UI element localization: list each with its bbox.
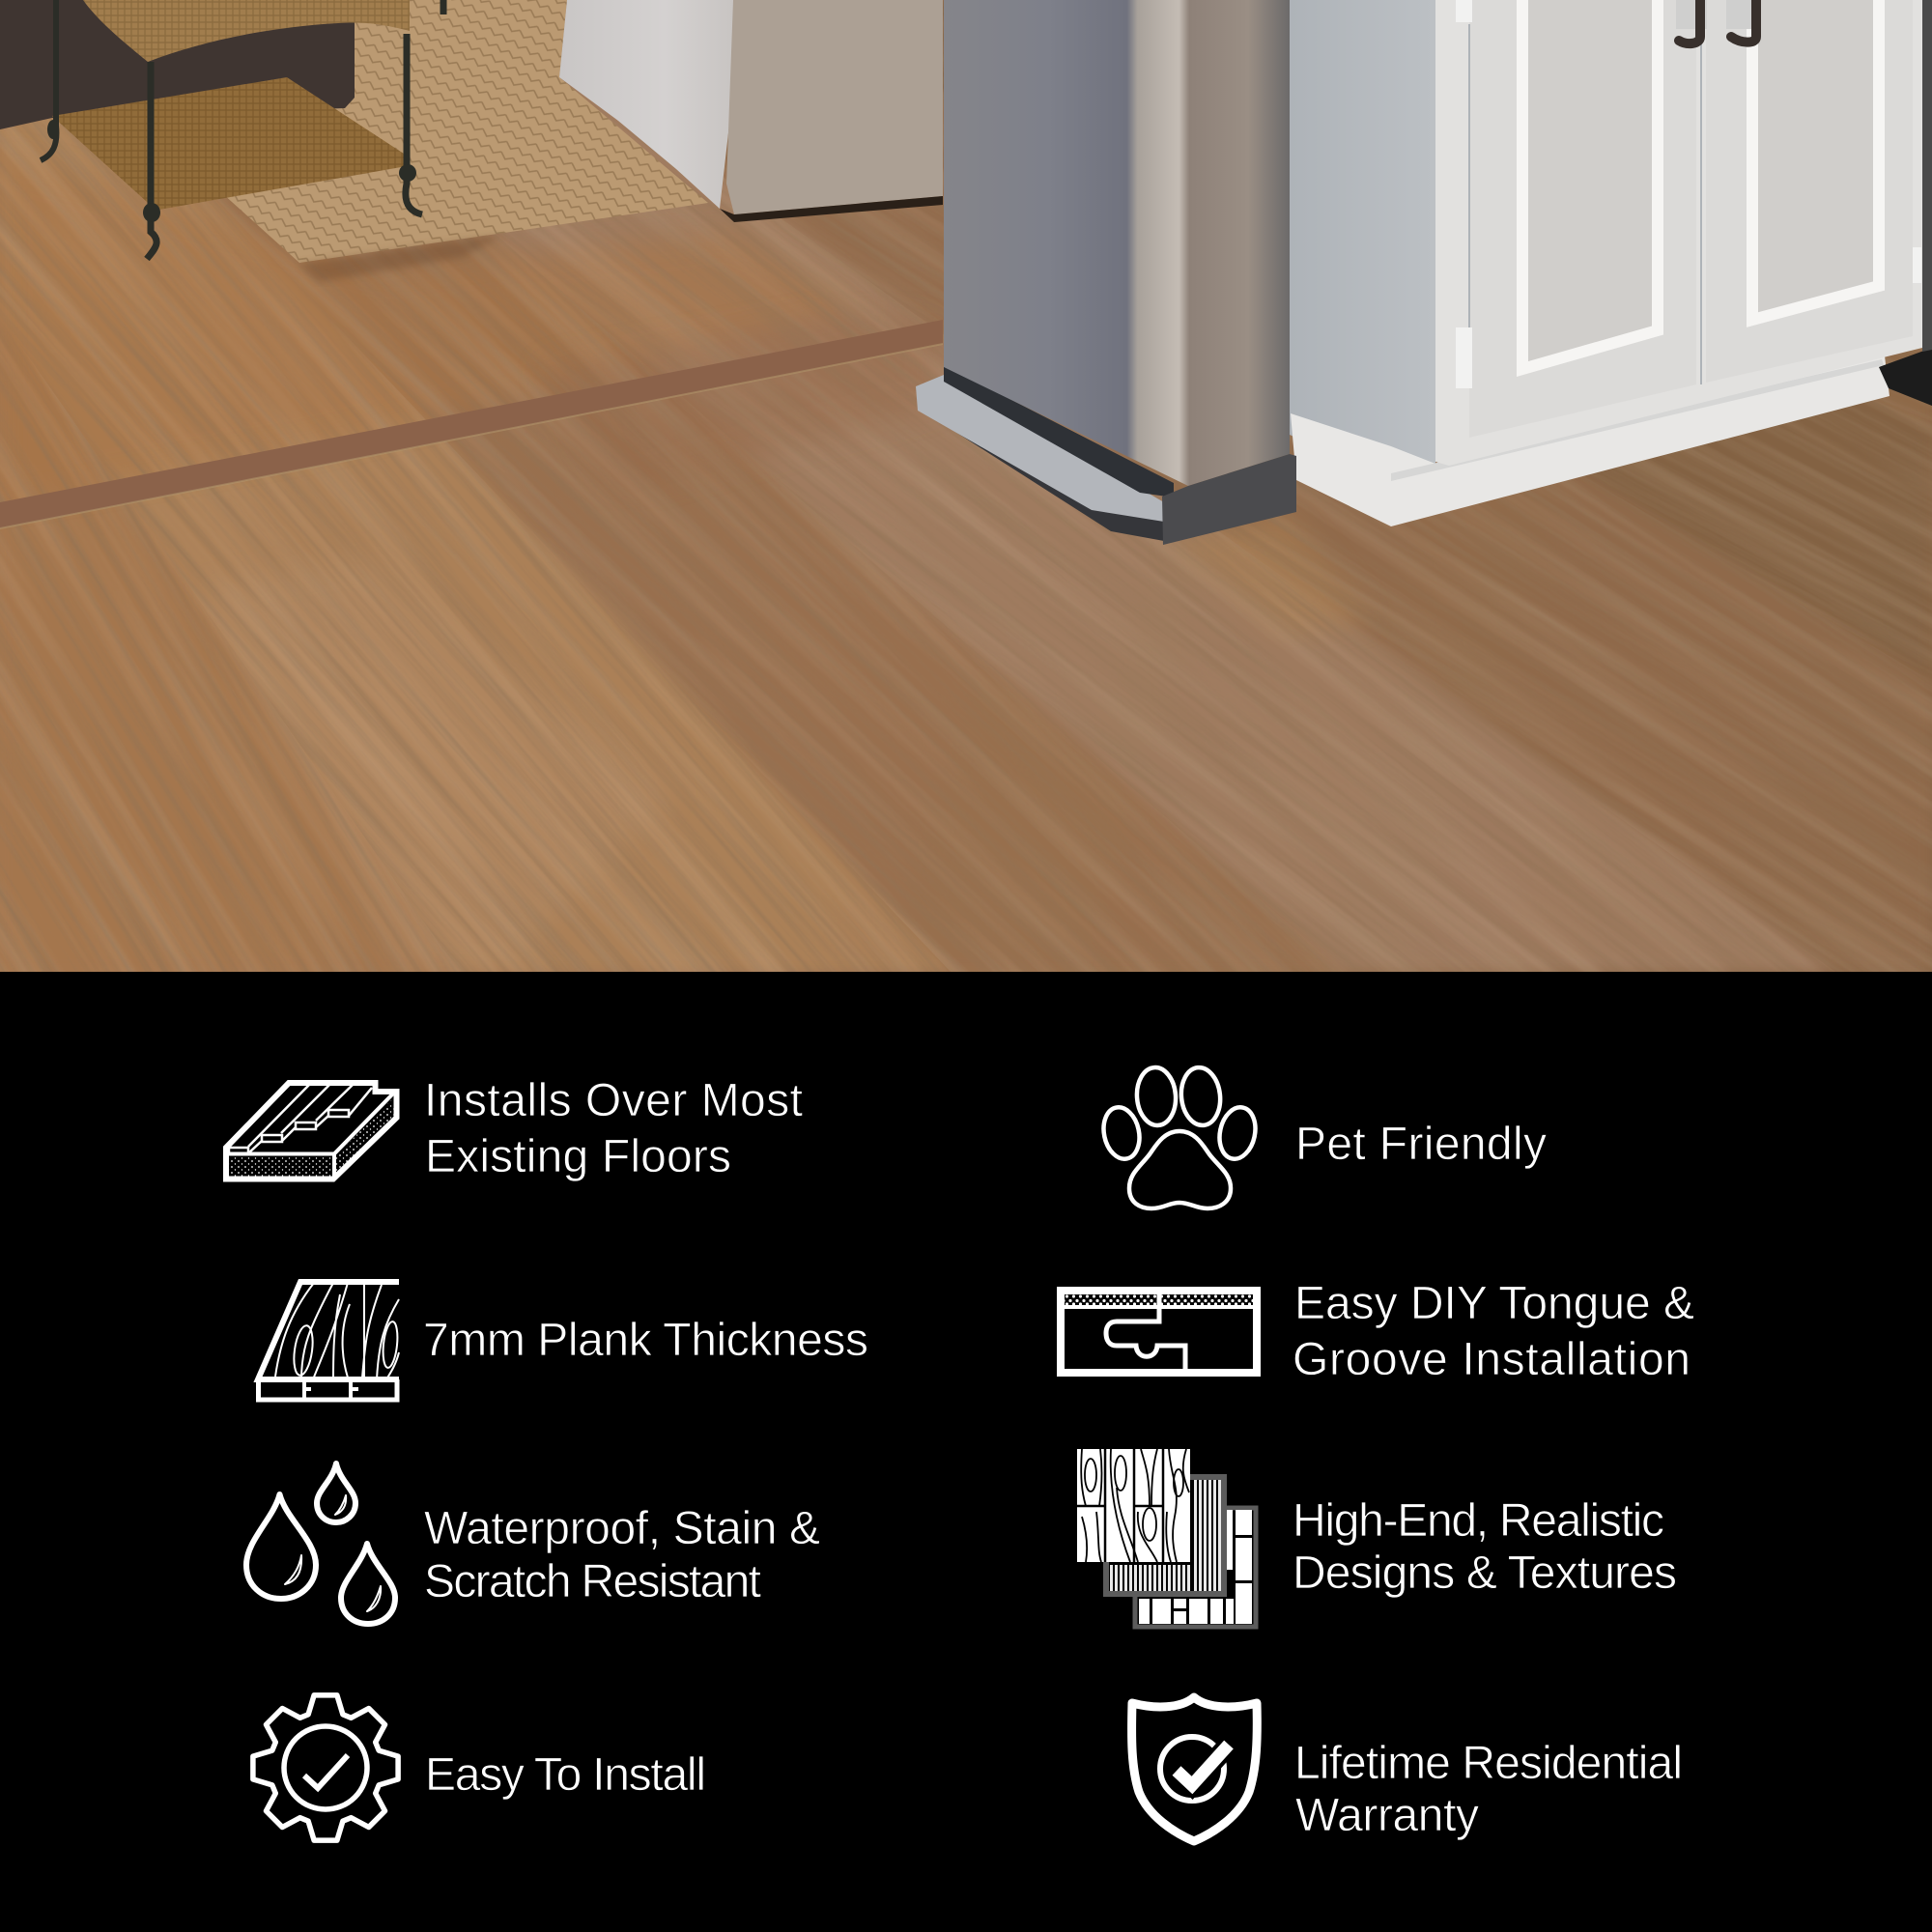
- wall side of cabinet: [1290, 0, 1435, 493]
- can body: [944, 0, 1290, 486]
- wicker side table: [41, 0, 443, 259]
- trash can: [916, 0, 1296, 545]
- label line 2: Warranty: [1295, 1790, 1479, 1841]
- icon: paw print: [1099, 1065, 1260, 1208]
- feature: pet friendly: [1099, 1065, 1547, 1208]
- feature: realistic designs: [1077, 1449, 1677, 1627]
- right door panel: [1752, 0, 1879, 320]
- left cabinet door: [1469, 0, 1696, 438]
- feature: easy to install: [253, 1695, 706, 1840]
- label: High-End, Realistic: [1293, 1495, 1664, 1547]
- icon: wood plank: [258, 1282, 399, 1400]
- label line 2: Scratch Resistant: [424, 1556, 761, 1607]
- rug: [222, 0, 708, 263]
- feature: lifetime warranty: [1132, 1697, 1683, 1841]
- photo: room with vinyl plank floor: [0, 0, 1932, 972]
- pedal shadow: [945, 406, 1164, 541]
- back tile swatch: [1135, 1508, 1256, 1627]
- label: Easy DIY Tongue &: [1294, 1278, 1694, 1329]
- table shelf: [52, 77, 407, 211]
- label: Lifetime Residential: [1294, 1738, 1683, 1789]
- dark appliance edge: [1879, 0, 1932, 406]
- left door panel: [1522, 0, 1658, 369]
- can black base: [1162, 454, 1296, 545]
- baseboard: [1291, 348, 1889, 526]
- feature: installs over most existing floors: [226, 1075, 803, 1182]
- middle striped swatch: [1106, 1477, 1224, 1594]
- label line 2: Existing Floors: [425, 1131, 731, 1182]
- door handles: [1676, 0, 1761, 43]
- icon: shield with check: [1132, 1697, 1257, 1841]
- beige skirt: [726, 0, 943, 214]
- icon: water drops: [246, 1463, 395, 1624]
- transition strip: [0, 320, 943, 529]
- icon: tongue and groove joint: [1061, 1287, 1257, 1377]
- feature: 7mm plank thickness: [258, 1282, 868, 1400]
- sofa: [0, 0, 355, 129]
- label line 2: Designs & Textures: [1293, 1548, 1677, 1599]
- rug shadow: [299, 235, 502, 282]
- hinges: [1456, 0, 1921, 388]
- label: Installs Over Most: [424, 1075, 803, 1126]
- label: Pet Friendly: [1295, 1119, 1547, 1170]
- label: Waterproof, Stain &: [424, 1503, 820, 1554]
- door gap and hinge line: [1469, 0, 1701, 384]
- floor: [0, 0, 1932, 972]
- front wood swatch: [1077, 1449, 1190, 1562]
- icon: stacked textures: [1077, 1449, 1256, 1627]
- feature: waterproof: [246, 1463, 820, 1624]
- table top: [83, 0, 410, 62]
- icon: gear with check: [253, 1695, 398, 1840]
- table legs: [41, 0, 443, 259]
- pedal: [916, 375, 1164, 522]
- shadow under skirt: [720, 196, 943, 222]
- label: Easy To Install: [425, 1749, 706, 1801]
- label line 2: Groove Installation: [1293, 1334, 1690, 1385]
- white slipcovered chair: [559, 0, 734, 209]
- cabinet frame: [1435, 0, 1922, 466]
- right cabinet door: [1706, 0, 1913, 383]
- label: 7mm Plank Thickness: [423, 1315, 868, 1366]
- can base band: [944, 365, 1174, 497]
- feature: tongue and groove: [1061, 1278, 1694, 1385]
- icon: layered floor: [226, 1083, 396, 1179]
